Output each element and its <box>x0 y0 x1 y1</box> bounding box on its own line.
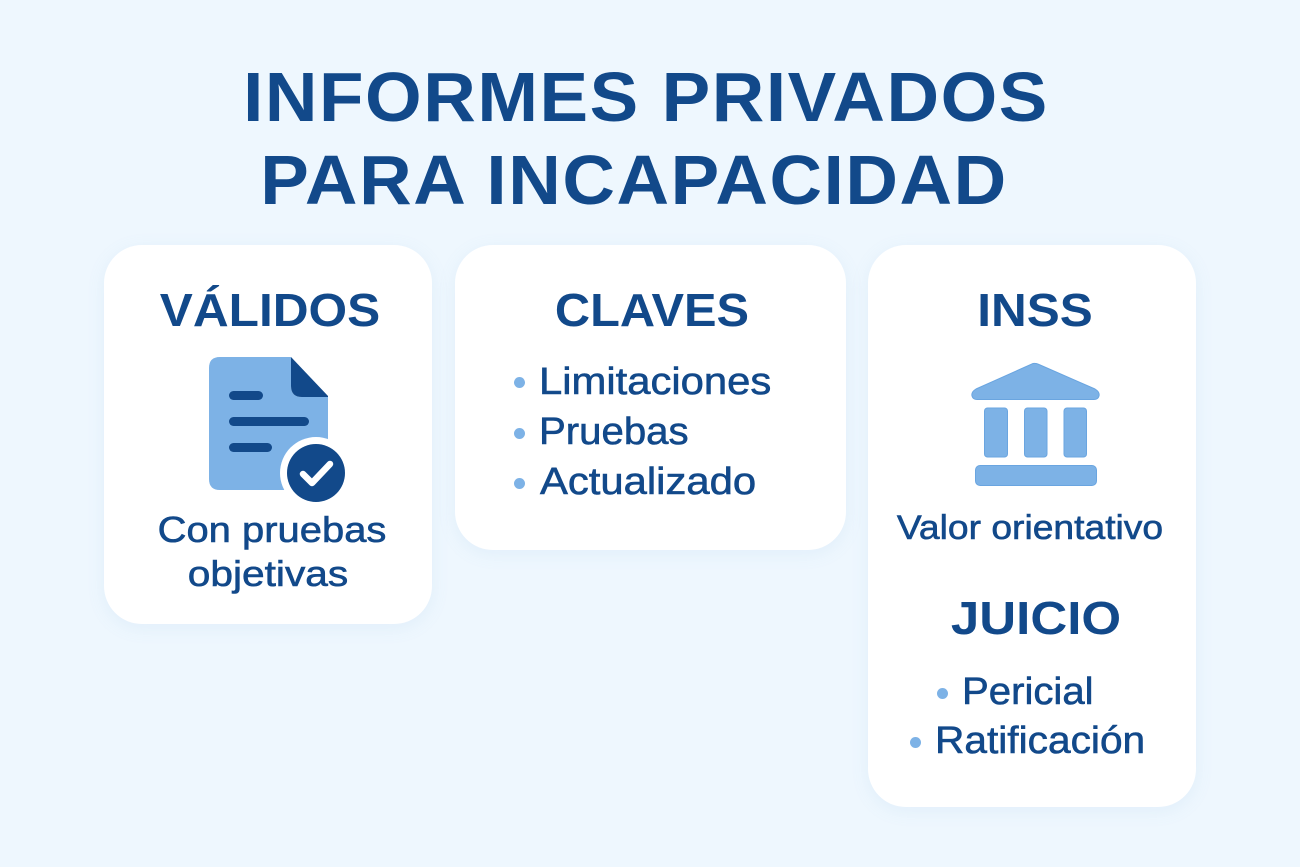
icon: institution building <box>971 362 1100 486</box>
title <box>243 58 1049 219</box>
text: con pruebas objetivas: Con pruebas <box>157 509 386 550</box>
panel: inss y juicio <box>868 245 1196 807</box>
list: claves: Pruebas <box>539 411 689 453</box>
text: valor orientativo: Valor orientativo <box>897 509 1163 547</box>
title: PARA INCAPACIDAD <box>260 141 1007 219</box>
panel: claves <box>455 245 846 550</box>
panel: válidos <box>104 245 432 624</box>
list: juicio <box>910 671 1145 762</box>
list: claves: Limitaciones <box>539 361 771 403</box>
heading: válidos: VÁLIDOS <box>160 284 380 336</box>
text: con pruebas objetivas <box>157 509 386 594</box>
heading: inss: INSS <box>977 284 1093 336</box>
title: INFORMES PRIVADOS <box>243 58 1049 136</box>
list: juicio: Ratificación <box>935 720 1145 762</box>
heading: juicio: JUICIO <box>950 592 1121 644</box>
icon: document with check <box>209 357 345 502</box>
list: claves <box>514 361 771 503</box>
text: con pruebas objetivas: objetivas <box>187 553 348 594</box>
list: claves: Actualizado <box>540 461 756 503</box>
heading: claves: CLAVES <box>555 284 749 336</box>
list: juicio: Pericial <box>962 671 1094 713</box>
